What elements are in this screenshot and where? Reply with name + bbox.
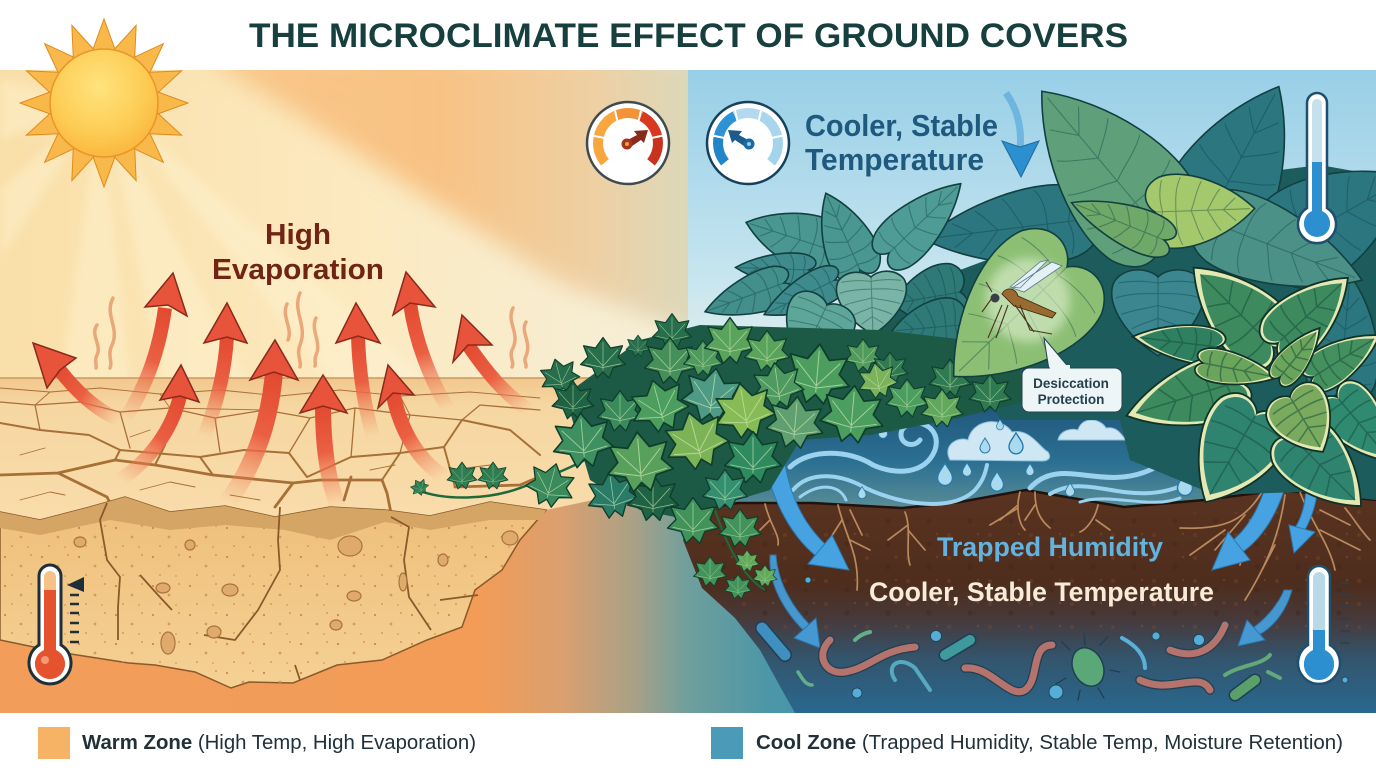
hosta: small green leaf <box>1063 183 1180 263</box>
arrow 9 <box>393 272 449 410</box>
hosta: left cluster <box>698 165 979 377</box>
arrow: lower right <box>1238 590 1292 646</box>
arrow: lower left <box>770 555 820 648</box>
bubbles <box>805 577 1348 699</box>
foliage backdrop <box>880 165 1376 500</box>
panel: humidity zone <box>735 385 1240 512</box>
text: soil temperature label: Cooler, Stable Temperature <box>869 577 1214 607</box>
legend: cool zone <box>711 727 1343 759</box>
heading: cooler stable temperature: Temperature <box>805 142 984 177</box>
ivy: small vine leaves <box>408 462 508 499</box>
heading: trapped humidity: Trapped Humidity <box>937 532 1163 562</box>
hosta: teal mid leaf <box>1185 179 1376 319</box>
title: THE MICROCLIMATE EFFECT OF GROUND COVERS <box>249 17 1128 55</box>
arrow 3 <box>120 365 199 480</box>
arrow 1 <box>33 343 120 420</box>
arrow: right small <box>1289 485 1318 553</box>
group: humid air swirls <box>790 422 1190 504</box>
arrow 5 <box>227 340 298 503</box>
heading: cooler stable temperature: Cooler, Stable <box>805 108 998 143</box>
heading: cooler stable temperature <box>805 108 998 177</box>
icon: mosquito <box>982 260 1062 338</box>
callout: desiccation protection: Protection <box>1038 392 1104 407</box>
callout: desiccation protection <box>1022 338 1122 412</box>
ivy: dark foliage mass <box>565 325 1030 520</box>
panel: warm zone sky <box>0 70 688 378</box>
icon: sun <box>20 19 188 187</box>
group: evaporation arrows <box>33 272 529 507</box>
ivy: leaves <box>522 314 1011 599</box>
illustration: mosquito leaf <box>911 213 1120 421</box>
panel: lower background gradient <box>0 470 1376 713</box>
worms <box>823 625 1225 692</box>
group: roots <box>760 492 1370 600</box>
ivy: trailing vine <box>418 450 600 498</box>
arrow 2 <box>124 273 187 420</box>
icon: cool thermometer top <box>1298 93 1336 243</box>
arrow: cooling down arrow <box>1002 93 1039 177</box>
heading: high evaporation: Evaporation <box>212 254 384 286</box>
group: ivy ground cover <box>408 314 1030 599</box>
heading: high evaporation <box>212 219 384 286</box>
group: tall hosta plants <box>698 53 1376 500</box>
arrow: left large <box>762 440 849 570</box>
microbes <box>762 628 1280 700</box>
ivy: hanging stem <box>715 510 765 590</box>
hosta: teal heart leaf <box>1112 270 1204 356</box>
legend: warm zone <box>38 727 476 759</box>
panel: moist soil cross-section <box>683 490 1376 713</box>
arrow 8 <box>378 365 444 477</box>
arrow 10 <box>453 315 529 410</box>
group: variegated hosta <box>1117 242 1376 530</box>
group: moisture arrows into soil <box>762 440 1318 648</box>
panel: cracked dry surface <box>0 378 670 520</box>
group: heat wisps <box>95 293 528 368</box>
hosta: back dark leaves <box>919 61 1376 404</box>
hosta: big green leaf <box>997 53 1216 283</box>
icon: warm thermometer <box>29 565 84 684</box>
arrow 7 <box>336 303 380 437</box>
callout: desiccation protection: Desiccation <box>1033 376 1109 391</box>
arrow: right large <box>1212 470 1290 570</box>
arrow 4 <box>204 303 247 437</box>
hosta: small yellow green leaf <box>1145 171 1256 249</box>
icon: cool gauge <box>707 102 789 184</box>
icon: cool thermometer bottom <box>1298 566 1350 684</box>
panel: cool zone sky <box>688 70 1376 400</box>
group: soil organisms <box>762 577 1348 700</box>
heading: high evaporation: High <box>265 219 331 251</box>
panel: dry subsoil cross-section <box>0 497 546 688</box>
legend: warm zone: Warm Zone (High Temp, High Evaporation) <box>82 732 476 754</box>
icon: warm gauge <box>587 102 669 184</box>
icon: humidity clouds and droplets <box>858 419 1192 499</box>
arrow 6 <box>300 375 347 507</box>
legend: cool zone: Cool Zone (Trapped Humidity, Stable Temp, Moisture Retention) <box>756 732 1343 754</box>
